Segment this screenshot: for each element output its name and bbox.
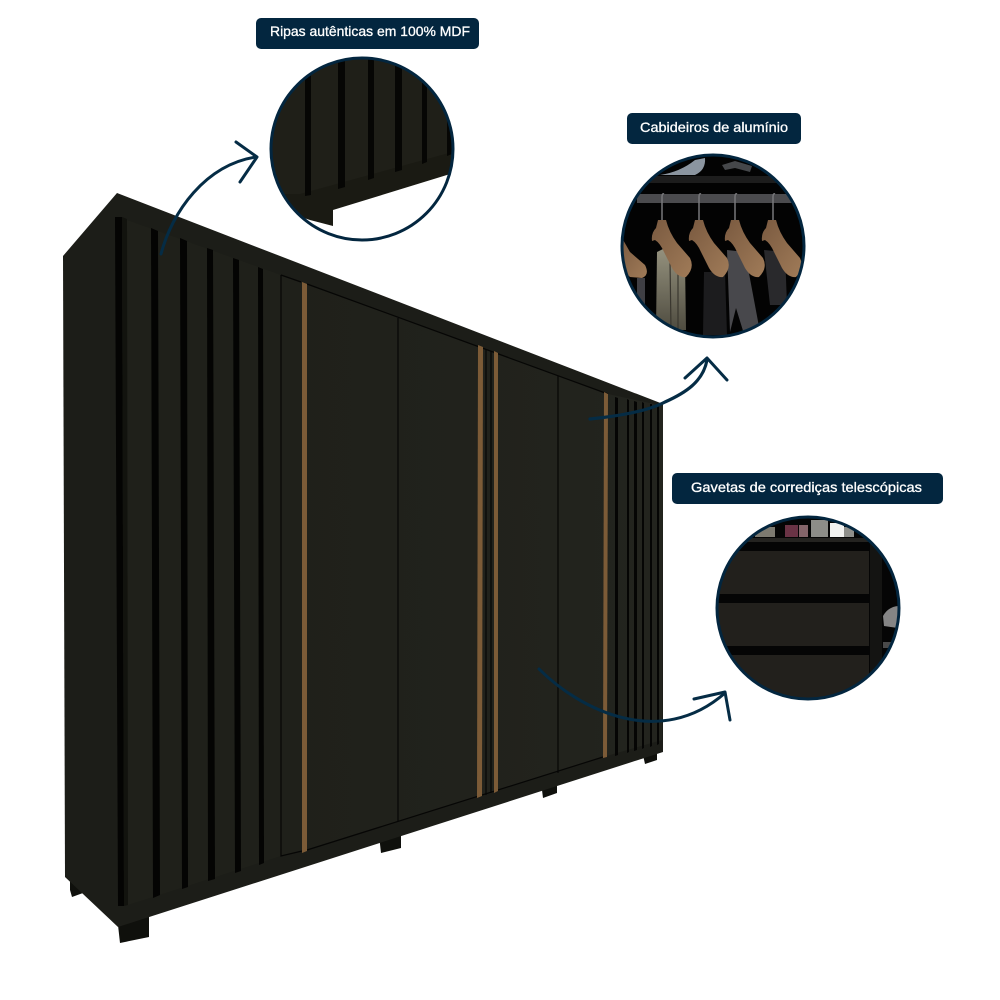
feet (70, 750, 657, 943)
arrow: to slats detail (161, 142, 257, 254)
label: rail: Cabideiros de alumínio (640, 119, 788, 135)
folded cloth (883, 606, 898, 628)
drawer fronts (715, 551, 869, 594)
door fronts (281, 275, 663, 856)
door panel lines (281, 275, 608, 856)
hooks (662, 194, 775, 220)
side column (870, 544, 882, 672)
wardrobe body (63, 193, 663, 927)
shelf items (755, 527, 775, 537)
label: drawers: Gavetas de corrediças telescópicas (691, 479, 922, 495)
slat faces (127, 220, 281, 905)
wardrobe (63, 193, 663, 943)
detail circle: rail and hangers (620, 155, 810, 337)
left slat grooves (115, 217, 264, 906)
rail (637, 194, 792, 203)
shelf (650, 176, 776, 183)
shelf edge (748, 538, 868, 542)
label: slats: Ripas autênticas em 100% MDF (270, 23, 470, 39)
arrow: to drawers detail (539, 669, 730, 721)
hangers (620, 220, 802, 278)
label: slats (256, 18, 479, 49)
label: drawers (672, 473, 943, 504)
detail circle: slats (265, 50, 460, 240)
arrow: to rail detail (590, 358, 727, 419)
groove shade (122, 217, 128, 906)
detail circle: drawers (715, 517, 905, 701)
label: rail (627, 113, 801, 144)
garments (656, 247, 686, 330)
right slat grooves (615, 397, 659, 756)
brass handles (302, 282, 608, 853)
folded clothes (660, 158, 705, 175)
